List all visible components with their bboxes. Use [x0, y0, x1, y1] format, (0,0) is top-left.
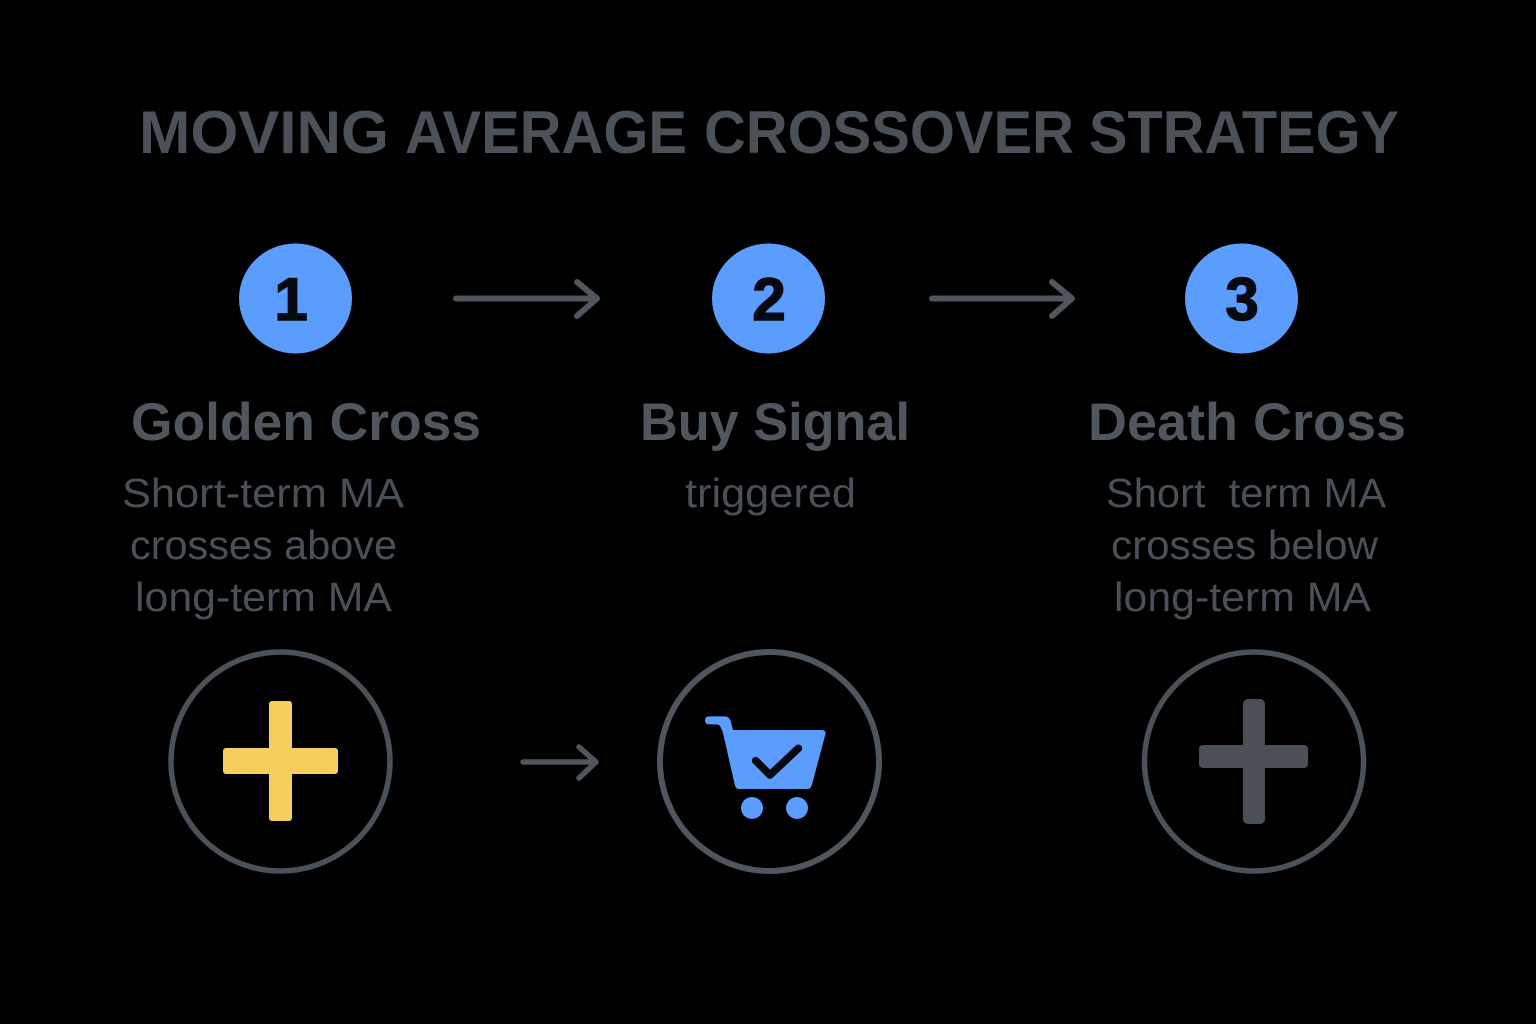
- icon: yellow plus in circle: [171, 652, 390, 871]
- arrow: step 2 to step 3: [932, 282, 1072, 316]
- icon: dark plus in circle: [1144, 652, 1364, 871]
- text: Golden Cross description: Short-term MA: [122, 470, 405, 516]
- title: AVERAGE: [405, 99, 687, 166]
- step 1 number badge: 1: [274, 266, 308, 333]
- step 2 number badge: [712, 244, 825, 354]
- text: Death Cross description: crosses below: [1111, 522, 1378, 568]
- heading: Golden Cross: Golden Cross: [131, 393, 481, 452]
- text: Golden Cross description: [122, 470, 405, 620]
- icon: shopping cart with check in circle: [660, 652, 879, 871]
- text: Death Cross description: [1106, 470, 1387, 620]
- text: Golden Cross description: long-term MA: [135, 574, 393, 620]
- step 2 number badge: 2: [752, 266, 786, 333]
- step 3 number badge: [1185, 244, 1298, 354]
- heading: Death Cross: Death Cross: [1088, 393, 1406, 452]
- arrow: plus to cart: [523, 747, 596, 778]
- text: Death Cross description: Short term MA: [1106, 470, 1387, 516]
- text: Golden Cross description: crosses above: [130, 522, 397, 568]
- title: [139, 99, 1399, 166]
- text: Death Cross description: long-term MA: [1114, 574, 1372, 620]
- step 1 number badge: [239, 244, 352, 354]
- arrow: step 1 to step 2: [456, 282, 597, 316]
- heading: Buy Signal: Buy Signal: [640, 393, 910, 452]
- title: CROSSOVER: [704, 99, 1074, 166]
- step 3 number badge: 3: [1225, 266, 1259, 333]
- text: Buy Signal description: triggered: [685, 470, 856, 516]
- title: MOVING: [139, 99, 389, 166]
- title: STRATEGY: [1089, 99, 1399, 166]
